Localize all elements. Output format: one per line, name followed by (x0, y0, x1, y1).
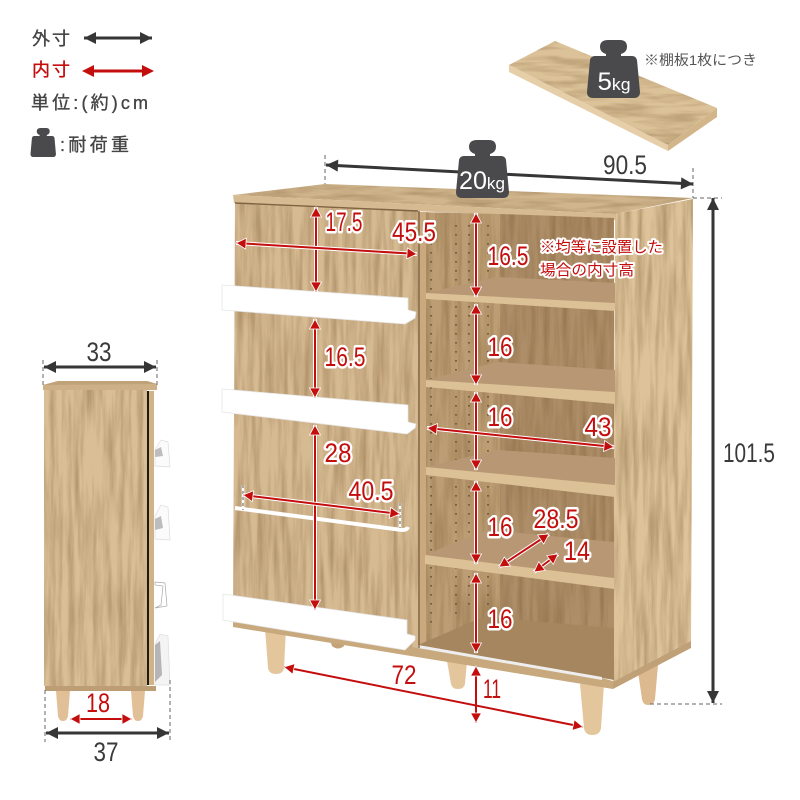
rail 4 (223, 594, 415, 650)
dimension: height 101.5: 101.5 (723, 438, 775, 468)
legend: load capacity: :耐荷重 (60, 135, 129, 155)
icon: 20kg weight (456, 140, 509, 198)
dimension: height 101.5 (650, 198, 775, 704)
legend: outer dimension: 外寸 (32, 29, 70, 49)
shelf 4 (425, 530, 614, 589)
dimension: depth 33 (43, 337, 157, 388)
dimension: 17.5: 17.5 (326, 207, 362, 237)
cabinet legs (265, 628, 658, 735)
dimension: 16 fifth (476, 573, 512, 653)
cabinet top (233, 184, 693, 220)
dimension: 43: 43 (584, 412, 612, 442)
dimension: width 90.5: 90.5 (603, 150, 647, 180)
door shadow edges (235, 203, 419, 648)
rail 2 (222, 389, 416, 434)
legend (30, 29, 154, 157)
dimension: 16 fourth (476, 481, 512, 564)
side view of cabinet (43, 381, 170, 721)
side view legs (56, 691, 145, 721)
dimension: 28.5 shelf width (499, 504, 578, 567)
dimension: depth 37: 37 (94, 737, 118, 767)
dimension: 18: 18 (86, 688, 110, 718)
shelf 2 (426, 362, 615, 404)
dimension: 16 third: 16 (488, 402, 512, 432)
icon: 20kg weight: 20kg (459, 167, 505, 195)
dimension: 16.5 door (315, 319, 366, 398)
interior height note: ※均等に設置した (540, 238, 663, 256)
dashes: shelf rail width (243, 485, 400, 528)
dimension: 16.5 door: 16.5 (324, 342, 366, 372)
dimension: 45.5 (236, 217, 436, 254)
dimension: 16.5 interior (476, 213, 528, 297)
dimension: 40.5: 40.5 (348, 476, 394, 506)
cabinet floor (418, 617, 614, 680)
dimension: leg span 72 (284, 660, 583, 727)
dimension: 16 fifth: 16 (488, 604, 512, 634)
shelf 3 (426, 450, 615, 497)
dimension: 40.5 (243, 476, 400, 514)
dimension: 16 fourth: 16 (488, 512, 512, 542)
dimension: 14 shelf depth: 14 (564, 536, 590, 566)
rail 3 (235, 508, 408, 530)
shelf 1 (426, 277, 615, 311)
dimension: 16 third (476, 392, 512, 470)
interior (418, 212, 615, 680)
legend: unit: 単位:(約)cm (31, 93, 148, 113)
interior height note (540, 238, 663, 279)
dimension: 16.5 interior: 16.5 (488, 241, 528, 271)
icon: 5kg weight: 5kg (598, 68, 630, 96)
dimension: 14 shelf depth (534, 536, 590, 572)
dimension: depth 33: 33 (86, 337, 112, 367)
dimension: depth 37 (45, 680, 170, 767)
dimension: 28: 28 (324, 438, 352, 468)
dimension: 43 (427, 412, 614, 447)
base front edge (233, 622, 613, 689)
dimension: 16 second: 16 (488, 332, 512, 362)
main cabinet (222, 184, 693, 735)
icon: 5kg weight (587, 40, 640, 98)
door (233, 203, 418, 648)
dimension: 16 second (476, 304, 512, 385)
dimension: 45.5: 45.5 (392, 217, 436, 247)
dimension: 28.5 shelf width: 28.5 (534, 504, 578, 534)
dimension: 17.5 (316, 207, 362, 292)
rail 1 (222, 285, 416, 324)
dimension: leg span 72: 72 (392, 660, 416, 690)
dimension: width 90.5 (325, 150, 693, 198)
right side plinth (613, 641, 691, 689)
shelf board illustration (509, 41, 717, 151)
dimension: leg height 11: 11 (483, 674, 501, 704)
dimension: 18 (70, 688, 132, 719)
side view rails (155, 440, 170, 685)
legend: inner dimension: 内寸 (32, 60, 70, 80)
dimension: leg height 11 (476, 666, 501, 723)
right side panel (613, 199, 693, 688)
shelf note: ※棚板1枚につき (644, 52, 757, 68)
interior height note: 場合の内寸高 (540, 262, 634, 279)
